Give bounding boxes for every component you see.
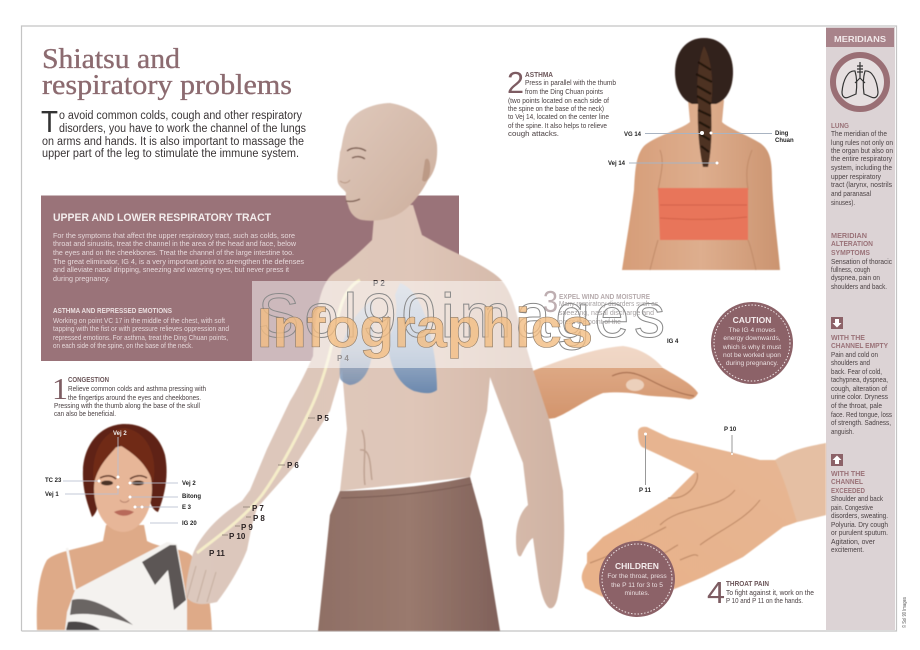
text: with the channel empty: anguish. [831,427,854,436]
man head [337,103,437,221]
face labels: Vej 1 [45,492,59,498]
text: 1 congestion: the fingertips around the eyes and cheekbones. [68,393,201,402]
text: 4 throat pain: THROAT PAIN [726,581,769,588]
text: 4 throat pain [707,575,814,610]
text: meridian alteration symptoms: MERIDIAN [831,233,867,240]
face labels: IG 20 [182,521,197,527]
callout: caution: The IG 4 moves [729,327,776,334]
callout: caution: energy downwards, [723,335,781,342]
meridian point labels [209,279,385,558]
panel: meridians sidebar [826,27,895,630]
callout: children: the P 11 for 3 to 5 [611,582,663,589]
hand labels: P 10 [724,427,737,433]
callout: caution: which is why it must [722,344,781,351]
man body [186,205,564,608]
callout: children: CHILDREN [615,561,659,571]
text: with the channel empty: of the throat, pale [831,401,882,410]
label: IG 4: IG 4 [667,339,679,345]
panel body text: the eyes and on the cheekbones. Treat the channel of the large intestine too. [53,248,294,257]
intro text: upper part of the leg to stimulate the immune system. [42,148,299,160]
meridian point labels: P 11 [209,549,225,558]
text: lung: and paranasal [831,189,871,198]
text: meridian alteration symptoms [831,233,892,291]
figure: woman seen from behind [608,38,794,270]
text: lung: The meridian of the [831,129,887,138]
panel body text: The great eliminator, IG 4, is a very important point to strengthen the defenses [53,257,304,266]
sidebar heading: MERIDIANS [834,35,887,44]
text: lung: lung rules not only on [831,138,893,147]
meridian point labels: P 4 [337,354,349,363]
watermark: Infographics [257,296,593,359]
text: with the channel exceeded: disorders, sweating. [831,511,888,520]
text: with the channel empty [831,335,892,436]
text: with the channel exceeded [831,471,888,554]
shorts [318,477,500,631]
text: 2 asthma: of the spine. It also helps to relieve [508,121,607,130]
lungs [340,283,437,393]
meridian point labels: P 8 [253,514,265,523]
asthma and repressed emotions: tapping with the fist or with pressure relieves oppression and [53,324,229,333]
text: lung: LUNG [831,123,849,130]
text: lung [831,123,893,207]
text: with the channel exceeded: CHANNEL [831,479,864,486]
text: lung: sinuses). [831,198,855,207]
text: 4 throat pain: P 10 and P 11 on the hands. [726,596,803,605]
panel: upper and lower respiratory tract [41,196,459,361]
text: 2 asthma: (two points located on each side of [508,96,610,105]
text: with the channel exceeded: Polyuria. Dry cough [831,520,888,529]
intro text [41,104,306,160]
text: 2 asthma: cough attacks. [508,129,559,138]
text: with the channel empty: Pain and cold on [831,350,878,359]
meridian point labels: P 6 [287,461,299,470]
text: with the channel empty: WITH THE [831,335,865,342]
credit: © Sol 90 Images [901,597,908,628]
text: with the channel empty: tachypnea, dyspnea, [831,375,888,384]
text: with the channel empty: back. Fear of cold, [831,367,882,376]
callout: caution: CAUTION [733,315,771,325]
intro text: o avoid common colds, cough and other respiratory [59,110,302,122]
text: 1 congestion: Pressing with the thumb along the base of the skull [54,401,200,410]
text: with the channel exceeded: EXCEEDED [831,488,865,495]
text: 2 asthma: from the Ding Chuan points [525,87,603,96]
text: 1 congestion: can also be beneficial. [54,409,116,418]
text: with the channel exceeded: or purulent sputum. [831,528,888,537]
back labels: Chuan [775,138,794,144]
callout: children: For the throat, press [607,573,667,580]
text: with the channel exceeded: Shoulder and back [831,494,883,503]
callout: caution: not be worked upon [723,352,781,359]
text: 1 congestion [52,371,206,418]
text: 4 throat pain: To fight against it, work on the [726,588,814,597]
back labels [608,131,794,167]
text: with the channel empty: CHANNEL EMPTY [831,343,888,350]
text: lung: the organ but also on [831,146,893,155]
title [42,44,292,101]
text: meridian alteration symptoms: dyspnea, pain on [831,273,880,282]
asthma and repressed emotions: repressed emotions. For asthma, treat the Ding Chuan points, [53,333,228,342]
title: Shiatsu and [42,44,180,75]
text: with the channel empty: face. Red tongue, loss [831,410,892,419]
text: lung: tract (larynx, nostrils [831,180,892,189]
figure: hand for point IG 4 [530,346,698,420]
text: lung: system, including the [831,163,892,172]
callout: children: minutes. [625,590,650,597]
asthma and repressed emotions: ASTHMA AND REPRESSED EMOTIONS [53,308,172,315]
face labels: Vej 2 [113,431,127,437]
text: 2 asthma: the spine on the base of the neck) [508,104,604,113]
panel heading: UPPER AND LOWER RESPIRATORY TRACT [53,212,271,224]
title: respiratory problems [42,70,292,101]
text: 3 expel wind and moisture: sneezing, nasal discharge and [559,308,654,317]
text: 2 asthma: Press in parallel with the thumb [525,78,616,87]
panel body text: throat and sinusitis, treat the channel in the area of the head and face, below [53,239,297,248]
text: meridian alteration symptoms: shoulders and back. [831,282,887,291]
meridian point labels: P 10 [229,532,246,541]
meridian point labels: P 7 [252,504,264,513]
text: 2 asthma: 2 [507,65,524,100]
text: 2 asthma [507,65,616,138]
text: with the channel empty: cough, alteration of [831,384,888,393]
text: meridian alteration symptoms: fullness, cough [831,265,870,274]
meridian point labels: P 5 [317,414,329,423]
intro text: T [41,104,58,139]
text: lung: the entire respiratory [831,154,892,163]
meridian point labels: P 2 [373,279,385,288]
text: with the channel exceeded: excitement. [831,545,864,554]
back labels: Vej 14 [608,161,626,167]
figure: man with lung meridian [186,103,564,631]
meridian point labels: P 9 [241,523,253,532]
panel body text: during pregnancy. [53,274,110,283]
icon: down arrow [831,317,843,329]
text: 2 asthma: ASTHMA [525,72,553,79]
face labels: TC 23 [45,478,62,484]
text: 1 congestion: CONGESTION [68,377,109,384]
text: 3 expel wind and moisture: Many respiratory disorders such as [559,299,658,308]
back labels: Ding [775,131,789,137]
figure: open hand [582,427,826,603]
hand labels [639,427,737,494]
callout: children [599,541,675,617]
watermark: Sol90images [258,282,665,351]
hand labels: P 11 [639,488,652,494]
text: lung: upper respiratory [831,172,881,181]
text: meridian alteration symptoms: Sensation of thoracic [831,257,892,266]
text: meridian alteration symptoms: ALTERATION [831,241,873,248]
text: meridian alteration symptoms: SYMPTOMS [831,250,870,257]
panel body text: and alleviate nasal dripping, sneezing and watering eyes, but never press it [53,265,290,274]
text: 4 throat pain: 4 [707,575,725,610]
panel body text [53,231,304,283]
text: 1 congestion: Relieve common colds and asthma pressing with [68,384,206,393]
asthma and repressed emotions: Working on point VC 17 in the middle of the chest, with soft [53,316,226,325]
face labels [45,431,201,527]
asthma and repressed emotions [53,308,229,350]
asthma and repressed emotions: on each side of the spine, on the base of the neck. [53,341,193,350]
lung meridian line [197,280,360,553]
sidebar heading [826,28,894,47]
text: 2 asthma: to Vej 14, located on the center line [508,112,609,121]
text: 3 expel wind and moisture: 3 [543,284,558,319]
text: with the channel exceeded: pain. Congestive [831,503,873,512]
text: with the channel empty: of strength. Sadness, [831,418,891,427]
figure: woman facing front [37,424,212,630]
intro text: disorders, you have to work the channel of the lungs [59,123,306,135]
callout: caution [711,302,793,384]
text: 3 expel wind and moisture: EXPEL WIND AND MOISTURE [559,294,650,301]
text: with the channel empty: shoulders and [831,358,870,367]
text: 1 congestion: 1 [52,371,68,406]
face labels: Vej 2 [182,481,196,487]
icon: up arrow [831,454,843,466]
face labels: E 3 [182,505,192,511]
text: with the channel exceeded: WITH THE [831,471,865,478]
panel body text: For the symptoms that affect the upper respiratory tract, such as colds, sore [53,231,295,240]
back labels: VG 14 [624,132,642,138]
face labels: Bitong [182,494,201,500]
text: with the channel exceeded: Agitation, over [831,537,875,546]
callout: caution: during pregnancy. [726,360,778,367]
icon: lungs [833,55,887,109]
intro text: on arms and hands. It is also important to massage the [42,136,304,148]
text: 3 expel wind and moisture: press the point of the [559,317,621,326]
text: 3 expel wind and moisture [543,284,658,326]
text: with the channel empty: urine color. Dryness [831,392,888,401]
